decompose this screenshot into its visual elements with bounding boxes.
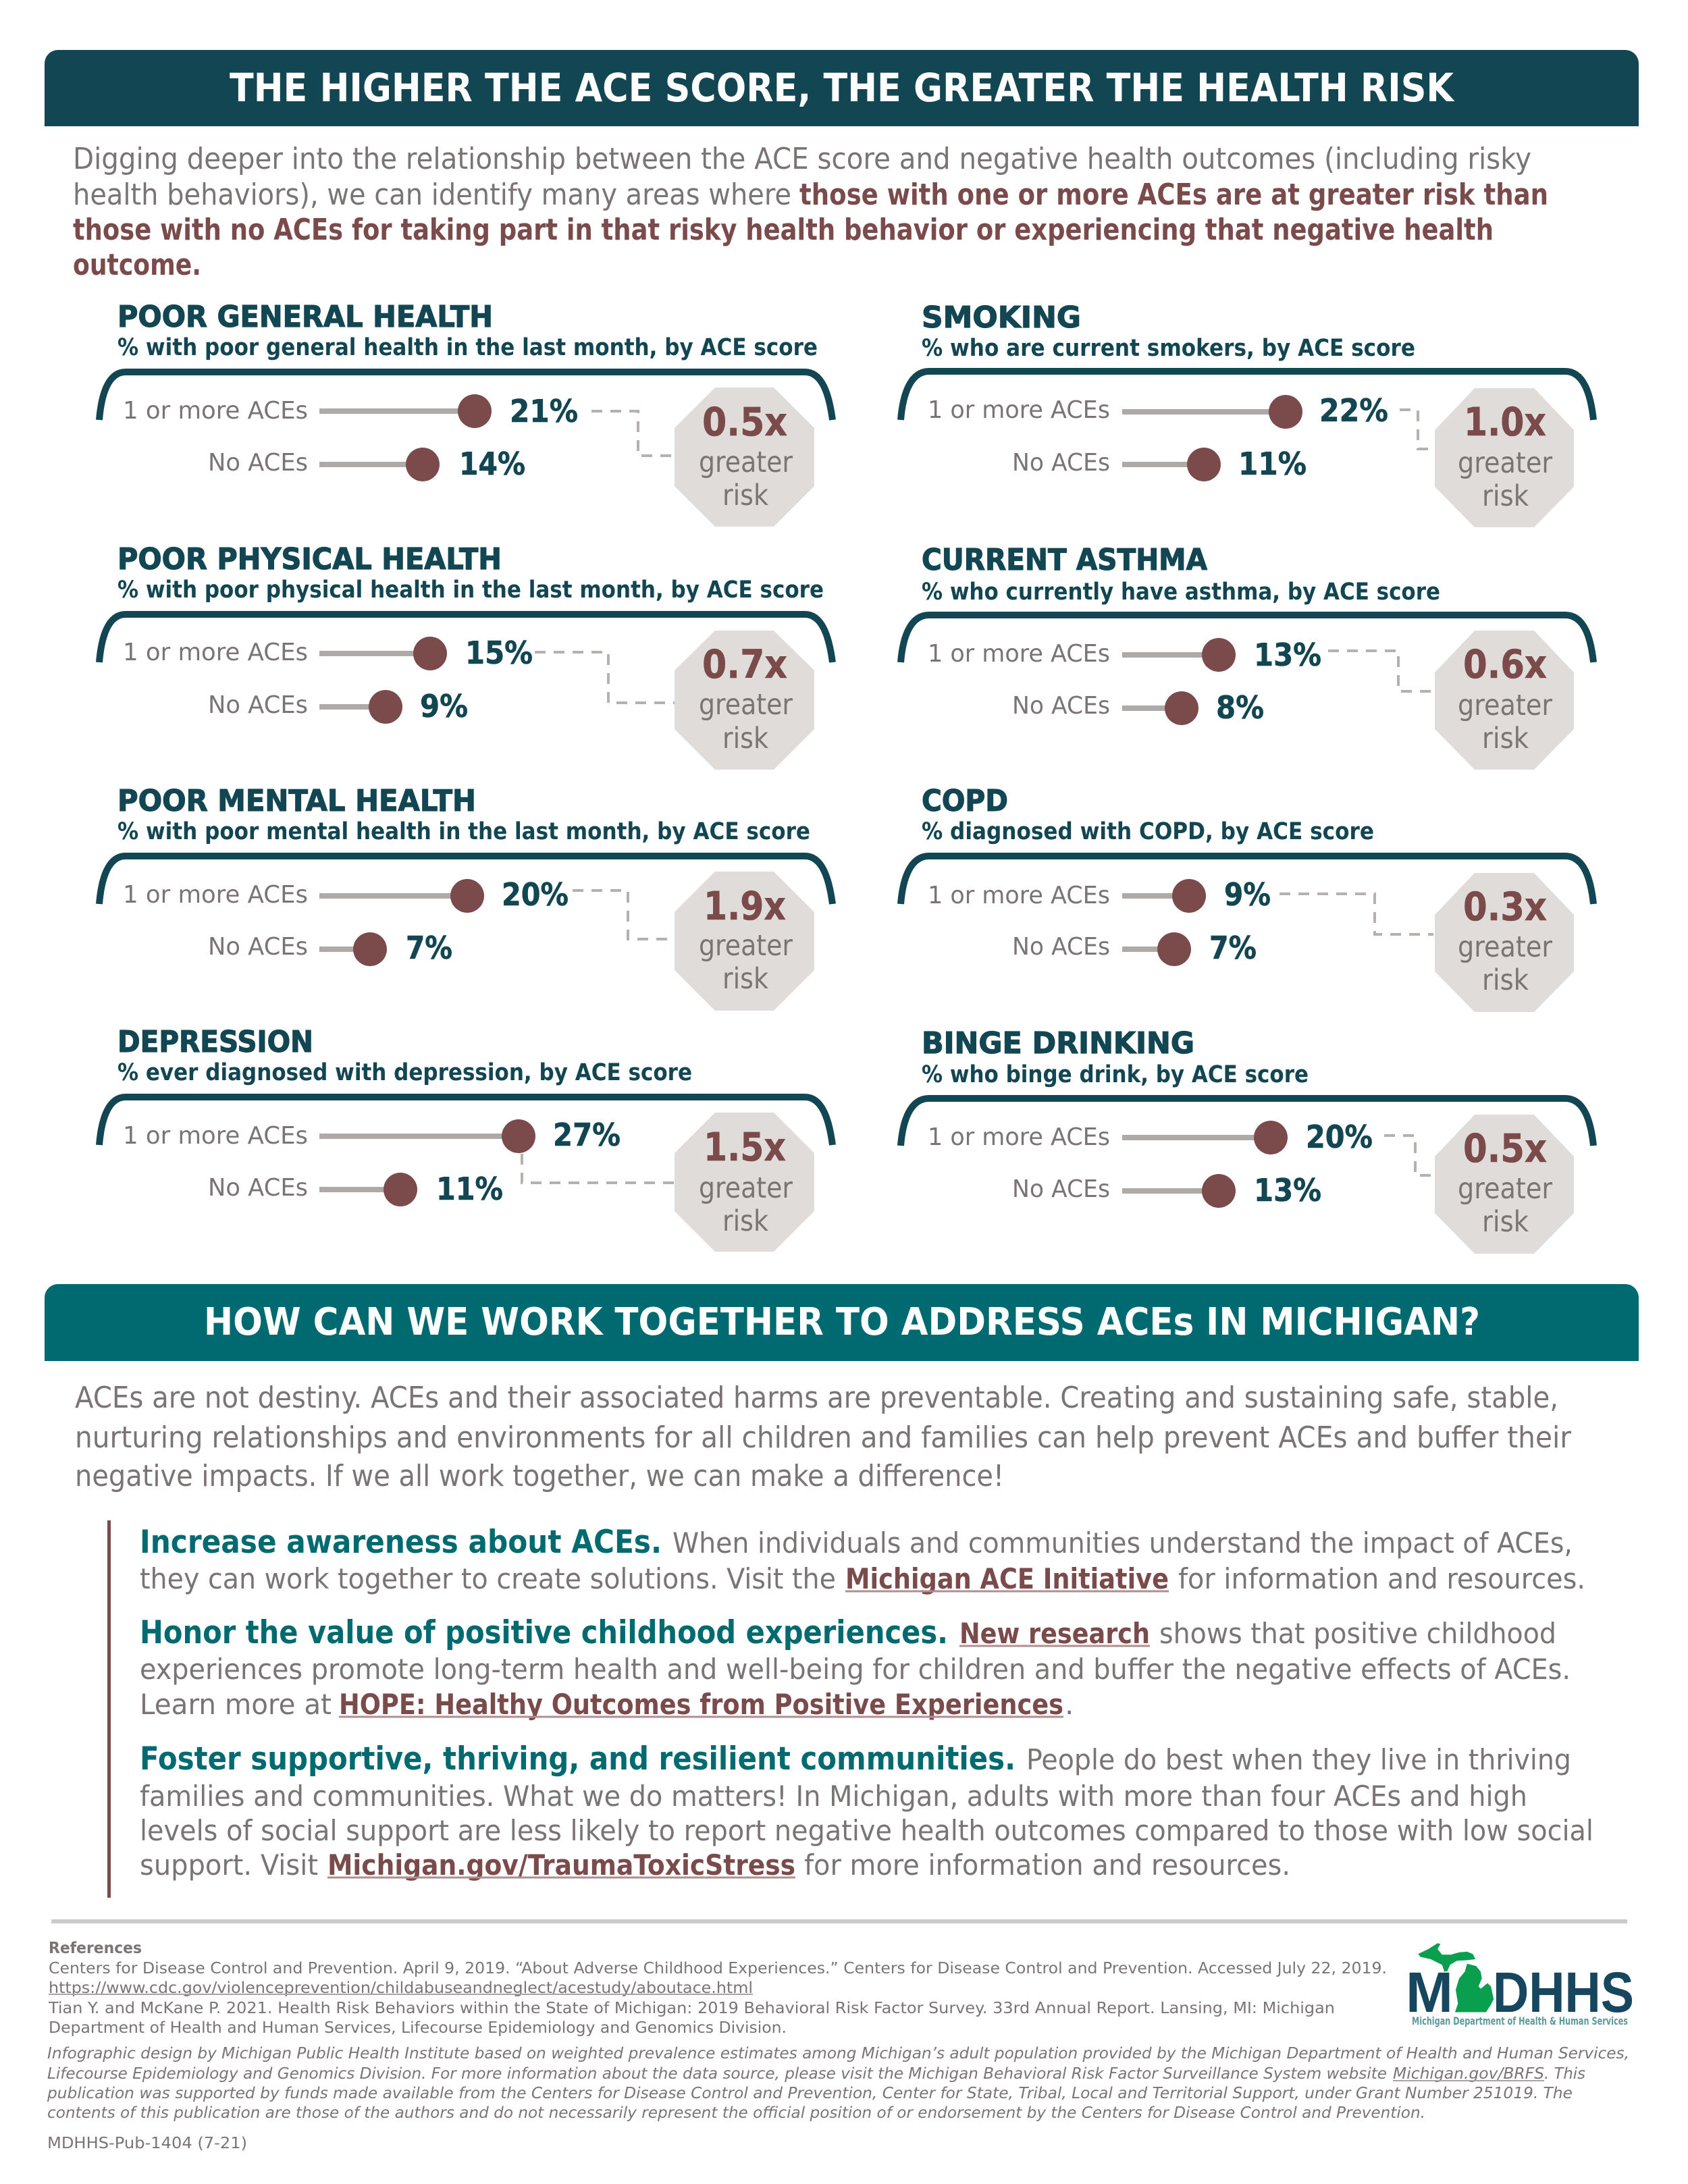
octagon: 1.9x greater risk [675, 872, 814, 1011]
row: 1 or more ACEs 9%: 1 or more ACEs [928, 882, 1110, 909]
action: increase awareness: When individuals and communities understand the impact of ACEs, [672, 1526, 1573, 1560]
octagon: 1.5x greater risk: risk [722, 1204, 768, 1238]
row: 1 or more ACEs 27% [123, 1117, 621, 1153]
action: foster communities: families and communities. What we do matters! In Michigan, adults with more than four ACEs and high [140, 1780, 1527, 1813]
row: no ACEs 8%: 8% [1216, 689, 1264, 726]
octagon: 0.6x greater risk: 0.6x [1463, 641, 1547, 687]
row: no ACEs 11%: 11% [436, 1171, 503, 1207]
action: honor positive childhood experiences: Learn more at [140, 1688, 332, 1721]
octagon: 0.7x greater risk: risk [722, 722, 768, 755]
action: honor positive childhood experiences [140, 1614, 1571, 1721]
subheading: % ever diagnosed with depression, by ACE score [117, 1059, 692, 1086]
row: 1 or more ACEs 20%: 1 or more ACEs [928, 1123, 1110, 1151]
row: no ACEs 13%: No ACEs [1012, 1175, 1110, 1203]
row: no ACEs 9%: No ACEs [208, 691, 308, 719]
row: 1 or more ACEs 20%: 20% [502, 876, 569, 913]
octagon: 0.6x greater risk: risk [1482, 722, 1529, 755]
row: no ACEs 13%: 13% [1254, 1172, 1321, 1208]
row: no ACEs 8%: No ACEs [1012, 692, 1110, 720]
octagon: 0.3x greater risk [1435, 873, 1574, 1012]
design and funding note: Michigan.gov/BRFS [1393, 2065, 1544, 2083]
action: honor positive childhood experiences: shows that positive childhood [1159, 1617, 1556, 1650]
action: foster communities: People do best when they live in thriving [1026, 1743, 1571, 1776]
row: no ACEs 7%: 7% [1209, 930, 1257, 966]
row: 1 or more ACEs 20%: 1 or more ACEs [123, 881, 308, 909]
chart: binge drinking [901, 1026, 1593, 1254]
octagon: 0.3x greater risk: risk [1482, 963, 1529, 997]
row: no ACEs 11%: No ACEs [1012, 449, 1110, 477]
section header: ACE score and health risk [45, 50, 1639, 126]
row: no ACEs 14%: 14% [459, 446, 525, 482]
design and funding note: contents of this publication are those of the authors and do not necessarily represent the official position of or endorsement by the Centers for Disease Control and Prevention. [47, 2104, 1425, 2122]
action: foster communities: Michigan.gov/TraumaToxicStress [327, 1848, 795, 1882]
octagon: 0.5x greater risk: 0.5x [702, 399, 787, 445]
octagon: 0.5x greater risk: greater [1458, 1172, 1552, 1206]
row: no ACEs 8% [1012, 689, 1264, 726]
second section paragraph [75, 1381, 1572, 1493]
octagon: 0.7x greater risk [675, 631, 814, 770]
heading: poor physical health: POOR PHYSICAL HEALTH [117, 542, 502, 577]
octagon: 0.5x greater risk [1435, 1115, 1574, 1254]
heading: current asthma: CURRENT ASTHMA [922, 543, 1207, 577]
intro paragraph: health behaviors), we can identify many areas where [73, 178, 791, 212]
row: 1 or more ACEs 15%: 1 or more ACEs [123, 639, 308, 666]
action: honor positive childhood experiences: experiences promote long-term health and well-being for children and buffer the negative effects of ACEs. [140, 1653, 1571, 1686]
row: no ACEs 13% [1012, 1172, 1321, 1208]
chart: poor general health [99, 300, 833, 527]
action: increase awareness: Increase awareness about ACEs. [140, 1524, 662, 1561]
design and funding note: . This [1544, 2065, 1585, 2083]
row: 1 or more ACEs 13%: 13% [1254, 637, 1321, 673]
row: no ACEs 7%: No ACEs [208, 933, 308, 961]
references: Tian Y. and McKane P. 2021. Health Risk Behaviors within the State of Michigan: 2019 Behavioral Risk Factor Survey. 33rd Annual Report. Lansing, MI: Michigan [48, 2000, 1335, 2017]
design and funding note [47, 2045, 1629, 2122]
octagon: 1.0x greater risk: greater [1458, 446, 1552, 480]
second section paragraph: nurturing relationships and environments for all children and families can help prevent ACEs and buffer their [75, 1420, 1572, 1455]
row: 1 or more ACEs 22% [928, 392, 1388, 429]
octagon: 1.0x greater risk: risk [1482, 479, 1529, 513]
heading: depression: DEPRESSION [117, 1025, 313, 1059]
octagon: 0.3x greater risk: greater [1458, 930, 1552, 964]
publication number: MDHHS-Pub-1404 (7-21) [47, 2135, 247, 2152]
octagon: 1.9x greater risk: 1.9x [704, 883, 786, 929]
action: increase awareness [140, 1524, 1585, 1595]
intro paragraph [73, 142, 1548, 282]
second section paragraph: ACEs are not destiny. ACEs and their associated harms are preventable. Creating and sustaining safe, stable, [75, 1381, 1558, 1415]
row: no ACEs 9%: 9% [420, 688, 468, 724]
chart: COPD [901, 784, 1593, 1012]
row: no ACEs 7% [1012, 930, 1257, 966]
heading: binge drinking: BINGE DRINKING [922, 1026, 1194, 1061]
octagon: 1.5x greater risk: greater [699, 1171, 793, 1205]
intro paragraph: those with one or more ACEs are at greater risk than [799, 178, 1548, 212]
logo: MDHHS: M [1406, 1961, 1453, 2024]
row: 1 or more ACEs 20%: 20% [1306, 1119, 1373, 1155]
row: 1 or more ACEs 21%: 1 or more ACEs [123, 397, 308, 425]
row: no ACEs 11% [208, 1171, 503, 1207]
row: no ACEs 14% [208, 446, 525, 482]
subheading: % with poor general health in the last month, by ACE score [117, 334, 818, 361]
references: References [49, 1940, 142, 1957]
octagon: 0.7x greater risk: 0.7x [702, 641, 787, 687]
action: honor positive childhood experiences: Honor the value of positive childhood experiences. [140, 1614, 948, 1651]
octagon: 1.9x greater risk: risk [722, 962, 768, 996]
subheading: % with poor physical health in the last month, by ACE score [117, 577, 824, 604]
row: 1 or more ACEs 13% [928, 637, 1321, 673]
intro paragraph: outcome. [73, 248, 201, 282]
row: 1 or more ACEs 20% [123, 876, 569, 913]
subheading: % diagnosed with COPD, by ACE score [922, 818, 1374, 845]
action: foster communities: levels of social support are less likely to report negative health outcomes compared to those with low social [140, 1814, 1593, 1847]
subheading: % who are current smokers, by ACE score [922, 335, 1415, 362]
row: 1 or more ACEs 15%: 15% [465, 635, 533, 671]
references: Department of Health and Human Services, Lifecourse Epidemiology and Genomics Division. [49, 2019, 787, 2037]
octagon: 0.7x greater risk: greater [699, 688, 793, 722]
row: 1 or more ACEs 13%: 1 or more ACEs [928, 640, 1110, 668]
octagon: 1.5x greater risk: 1.5x [704, 1124, 786, 1170]
chart: smoking [901, 300, 1593, 527]
octagon: 0.3x greater risk: 0.3x [1463, 884, 1547, 930]
section header: ACE score and health risk: THE HIGHER THE ACE SCORE, THE GREATER THE HEALTH RISK [230, 65, 1455, 111]
references [48, 1940, 1387, 2037]
row: 1 or more ACEs 27%: 1 or more ACEs [123, 1122, 308, 1150]
logo: MDHHS: DHHS [1493, 1961, 1634, 2024]
action: foster communities: Foster supportive, thriving, and resilient communities. [140, 1740, 1016, 1778]
octagon: 0.5x greater risk [675, 388, 814, 527]
chart: poor mental health [99, 784, 833, 1011]
section header: working together [45, 1284, 1639, 1361]
section header: working together: HOW CAN WE WORK TOGETHER TO ADDRESS ACEs IN MICHIGAN? [204, 1300, 1480, 1344]
design and funding note: publication was supported by funds made available from the Centers for Disease Control and Prevention, Center for State, Tribal, Local and Territorial Support, under Grant Number 251019. The [47, 2085, 1573, 2102]
row: 1 or more ACEs 15% [123, 635, 533, 671]
octagon: 0.6x greater risk [1435, 631, 1574, 770]
octagon: 0.5x greater risk: greater [699, 446, 793, 479]
heading: poor general health: POOR GENERAL HEALTH [117, 300, 493, 334]
chart: poor physical health [99, 542, 833, 770]
action: honor positive childhood experiences: . [1065, 1688, 1074, 1721]
row: no ACEs 7%: No ACEs [1012, 933, 1110, 961]
action: honor positive childhood experiences: HOPE: Healthy Outcomes from Positive Experiences [339, 1688, 1063, 1721]
heading: smoking: SMOKING [922, 300, 1081, 335]
octagon: 0.5x greater risk: 0.5x [1463, 1125, 1547, 1171]
row: no ACEs 11%: 11% [1238, 446, 1307, 482]
references: https://www.cdc.gov/violenceprevention/childabuseandneglect/acestudy/aboutace.html [49, 1979, 753, 1997]
octagon: 1.9x greater risk: greater [699, 929, 793, 963]
octagon: 0.5x greater risk: risk [722, 479, 768, 512]
action: increase awareness: for information and resources. [1178, 1562, 1585, 1595]
row: no ACEs 7% [208, 930, 452, 966]
row: 1 or more ACEs 21% [123, 393, 578, 429]
action: increase awareness: they can work together to create solutions. Visit the [140, 1562, 836, 1595]
design and funding note: Infographic design by Michigan Public Health Institute based on weighted prevalence estimates among Michigan’s adult population provided by the Michigan Department of Health and Human Services, [47, 2045, 1629, 2062]
octagon: 0.6x greater risk: greater [1458, 689, 1552, 722]
action: foster communities [140, 1740, 1593, 1882]
octagon: 0.5x greater risk: risk [1482, 1205, 1529, 1239]
chart: current asthma [901, 543, 1593, 770]
row: 1 or more ACEs 9%: 9% [1224, 876, 1271, 913]
chart: depression [99, 1025, 833, 1252]
action: honor positive childhood experiences: New research [959, 1617, 1150, 1650]
row: 1 or more ACEs 9% [928, 876, 1271, 913]
row: 1 or more ACEs 22%: 1 or more ACEs [928, 396, 1110, 424]
design and funding note: Lifecourse Epidemiology and Genomics Division. For more information about the data source, please visit the Michigan Behavioral Risk Factor Surveillance System website [47, 2065, 1387, 2083]
references: Centers for Disease Control and Prevention. April 9, 2019. “About Adverse Childhood Experiences.” Centers for Disease Control and Prevention. Accessed July 22, 2019. [49, 1960, 1387, 1977]
row: 1 or more ACEs 27%: 27% [553, 1117, 621, 1153]
subheading: % who binge drink, by ACE score [922, 1061, 1309, 1088]
logo: MDHHS [1406, 1943, 1634, 2027]
action: foster communities: for more information and resources. [804, 1848, 1290, 1882]
row: no ACEs 11%: No ACEs [208, 1174, 308, 1202]
row: no ACEs 14%: No ACEs [208, 449, 308, 477]
intro paragraph: Digging deeper into the relationship between the ACE score and negative health outcomes (including risky [73, 142, 1531, 176]
second section paragraph: negative impacts. If we all work together, we can make a difference! [75, 1459, 1004, 1493]
subheading: % who currently have asthma, by ACE score [922, 579, 1440, 606]
row: 1 or more ACEs 21%: 21% [510, 393, 578, 429]
row: 1 or more ACEs 20% [928, 1119, 1373, 1155]
action: increase awareness: Michigan ACE Initiative [845, 1562, 1169, 1595]
row: 1 or more ACEs 22%: 22% [1319, 392, 1388, 429]
subheading: % with poor mental health in the last month, by ACE score [117, 818, 810, 845]
heading: COPD: COPD [922, 784, 1008, 818]
octagon: 1.0x greater risk [1435, 388, 1574, 527]
row: no ACEs 9% [208, 688, 468, 724]
action: foster communities: support. Visit [140, 1848, 318, 1882]
row: no ACEs 11% [1012, 446, 1307, 482]
row: no ACEs 7%: 7% [406, 930, 452, 966]
heading: poor mental health: POOR MENTAL HEALTH [117, 784, 476, 818]
octagon: 1.0x greater risk: 1.0x [1464, 399, 1546, 445]
octagon: 1.5x greater risk [675, 1113, 814, 1252]
